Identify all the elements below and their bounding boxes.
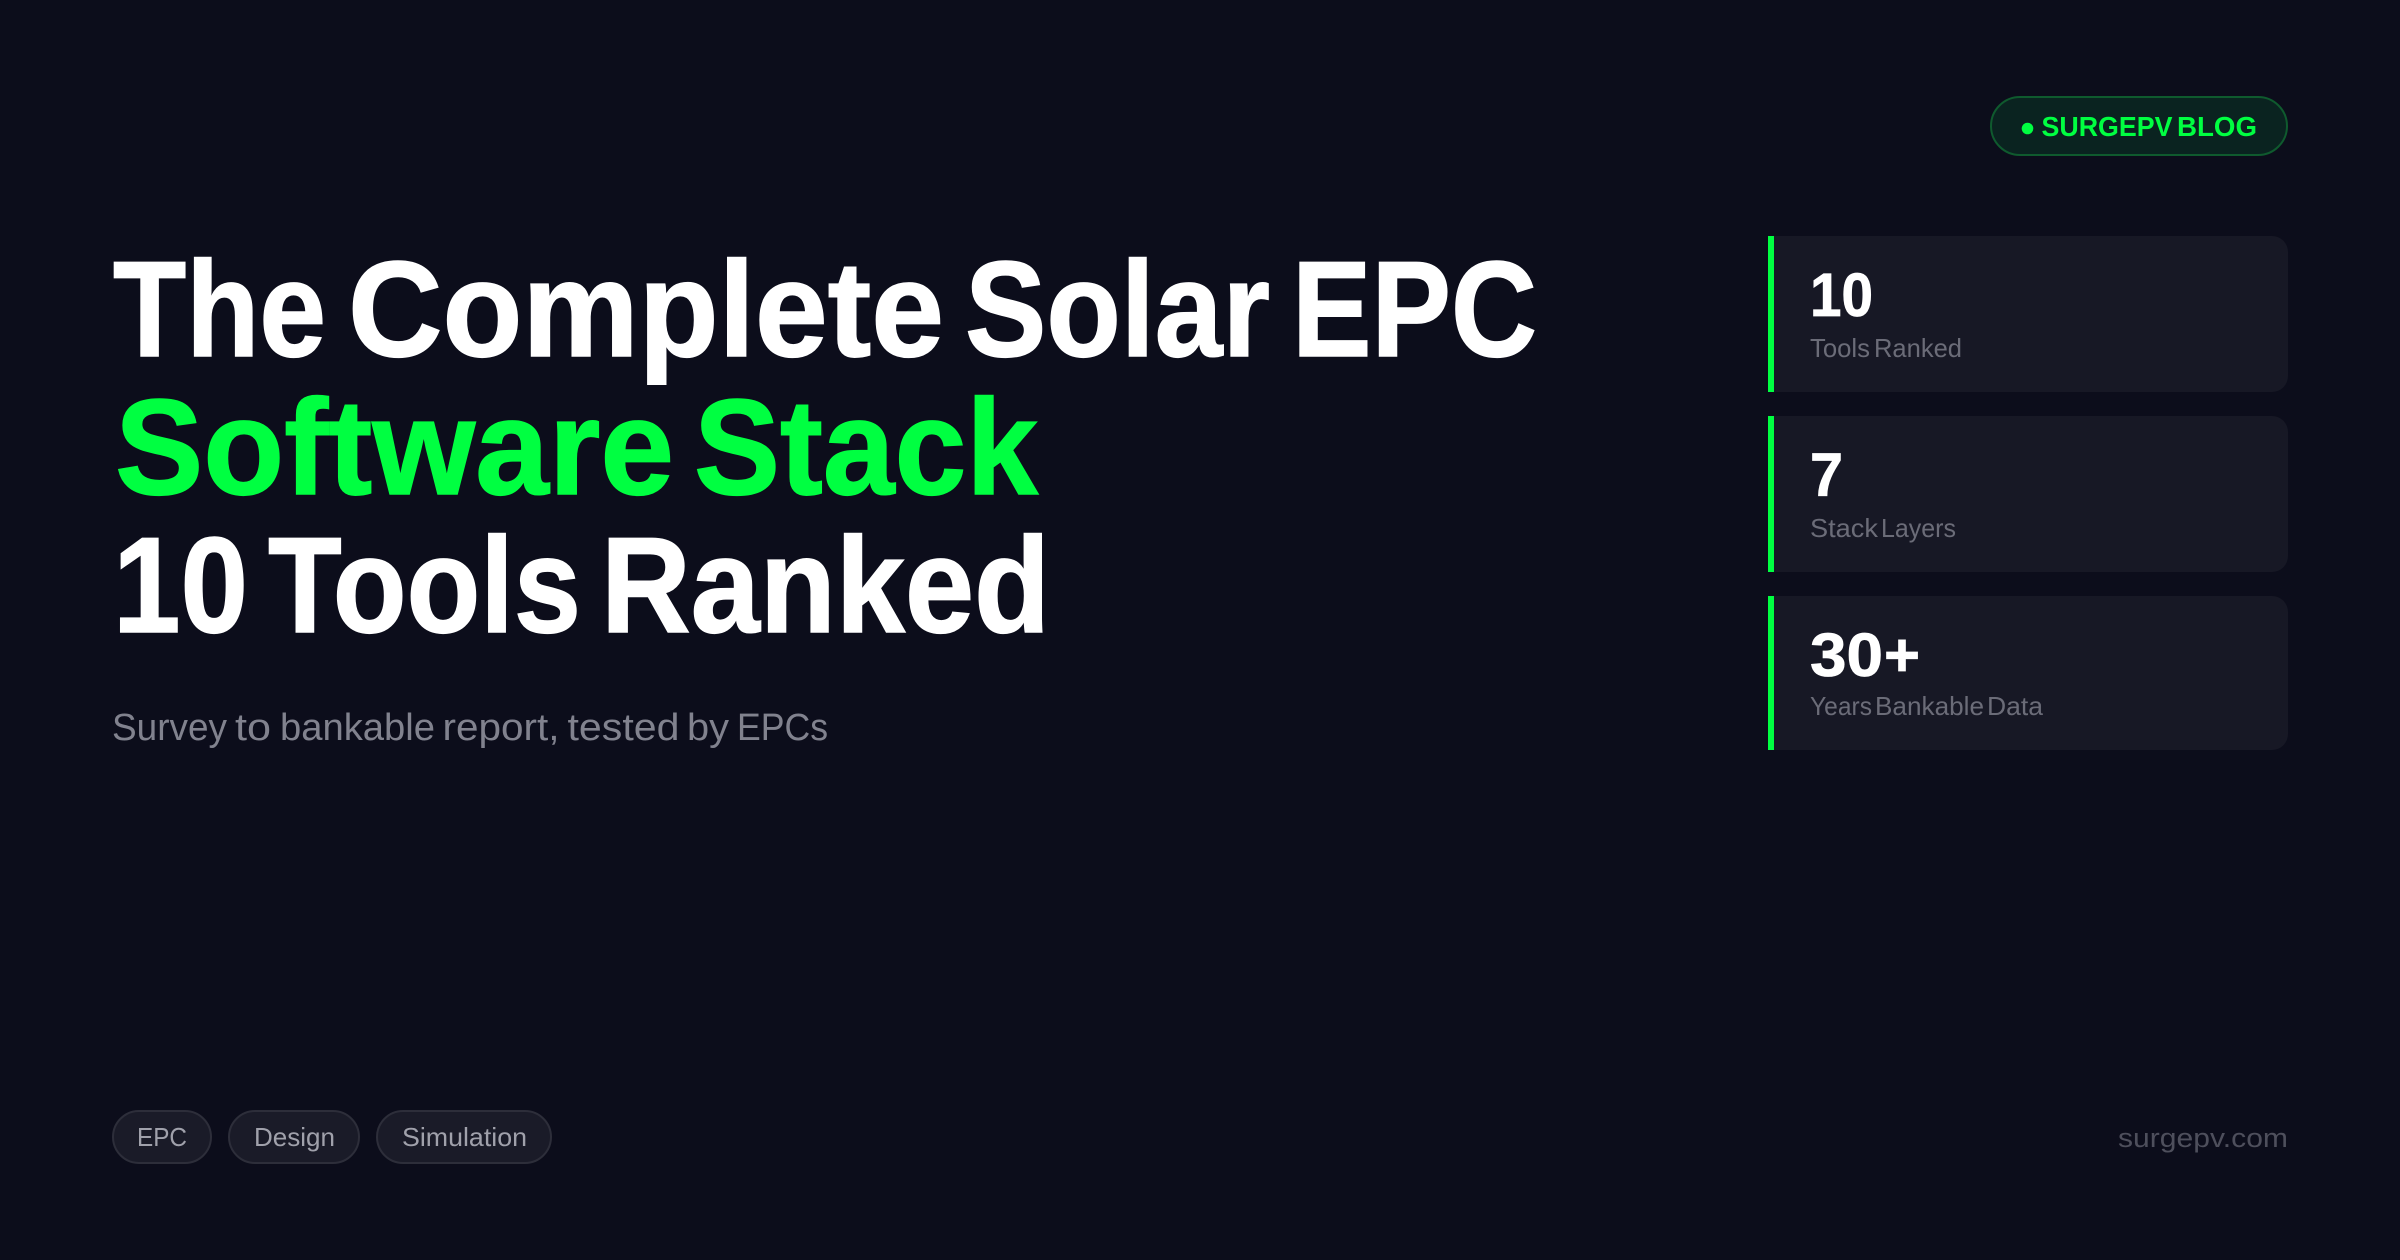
subtitle: Survey xyxy=(112,707,227,749)
stat card: 30+ years bankable data: + xyxy=(1884,621,1920,689)
stat card: 7 stack layers xyxy=(1768,416,2288,572)
title: Tools xyxy=(268,509,581,661)
badge: SurgePV Blog xyxy=(1991,97,2287,155)
stat card: 30+ years bankable data: Data xyxy=(1987,691,2044,721)
stat card: 7 stack layers: 7 xyxy=(1810,441,1843,509)
tag: EPC: EPC xyxy=(137,1122,187,1152)
title xyxy=(113,233,1537,661)
website url: surgepv.com xyxy=(2118,1123,2288,1153)
title: The xyxy=(113,233,326,385)
subtitle: to xyxy=(235,707,271,749)
subtitle: EPCs xyxy=(737,707,828,749)
title: Ranked xyxy=(601,509,1050,661)
stat card: 10 tools ranked: Ranked xyxy=(1874,333,1962,363)
title: Stack xyxy=(694,371,1038,523)
stat card: 10 tools ranked xyxy=(1768,236,2288,392)
stat card: 30+ years bankable data: Bankable xyxy=(1875,691,1984,721)
subtitle: bankable xyxy=(280,707,435,749)
tag: EPC xyxy=(113,1111,211,1163)
title: 10 xyxy=(113,509,248,661)
stat card: 10 tools ranked: 10 xyxy=(1810,261,1873,329)
tag: Design: Design xyxy=(254,1122,335,1152)
stat card: 30+ years bankable data: Years xyxy=(1810,691,1872,721)
title: Solar xyxy=(965,233,1270,385)
subtitle: by xyxy=(687,707,729,749)
tag: Simulation: Simulation xyxy=(402,1122,527,1152)
stat card: 7 stack layers: Stack xyxy=(1810,513,1879,543)
stat card: 30+ years bankable data: 30 xyxy=(1810,621,1883,689)
subtitle: report, xyxy=(442,707,560,749)
badge: SurgePV Blog: BLOG xyxy=(2177,111,2257,142)
tag: Design xyxy=(229,1111,359,1163)
badge: SurgePV Blog: SURGEPV xyxy=(2042,111,2173,142)
title: Software xyxy=(115,371,674,523)
stat card: 7 stack layers: Layers xyxy=(1881,513,1956,543)
title: EPC xyxy=(1292,233,1537,385)
title: Complete xyxy=(348,233,944,385)
tag: Simulation xyxy=(377,1111,551,1163)
stat card: 30+ years bankable data xyxy=(1768,596,2288,750)
stat card: 10 tools ranked: Tools xyxy=(1810,333,1870,363)
subtitle: tested xyxy=(568,707,680,749)
